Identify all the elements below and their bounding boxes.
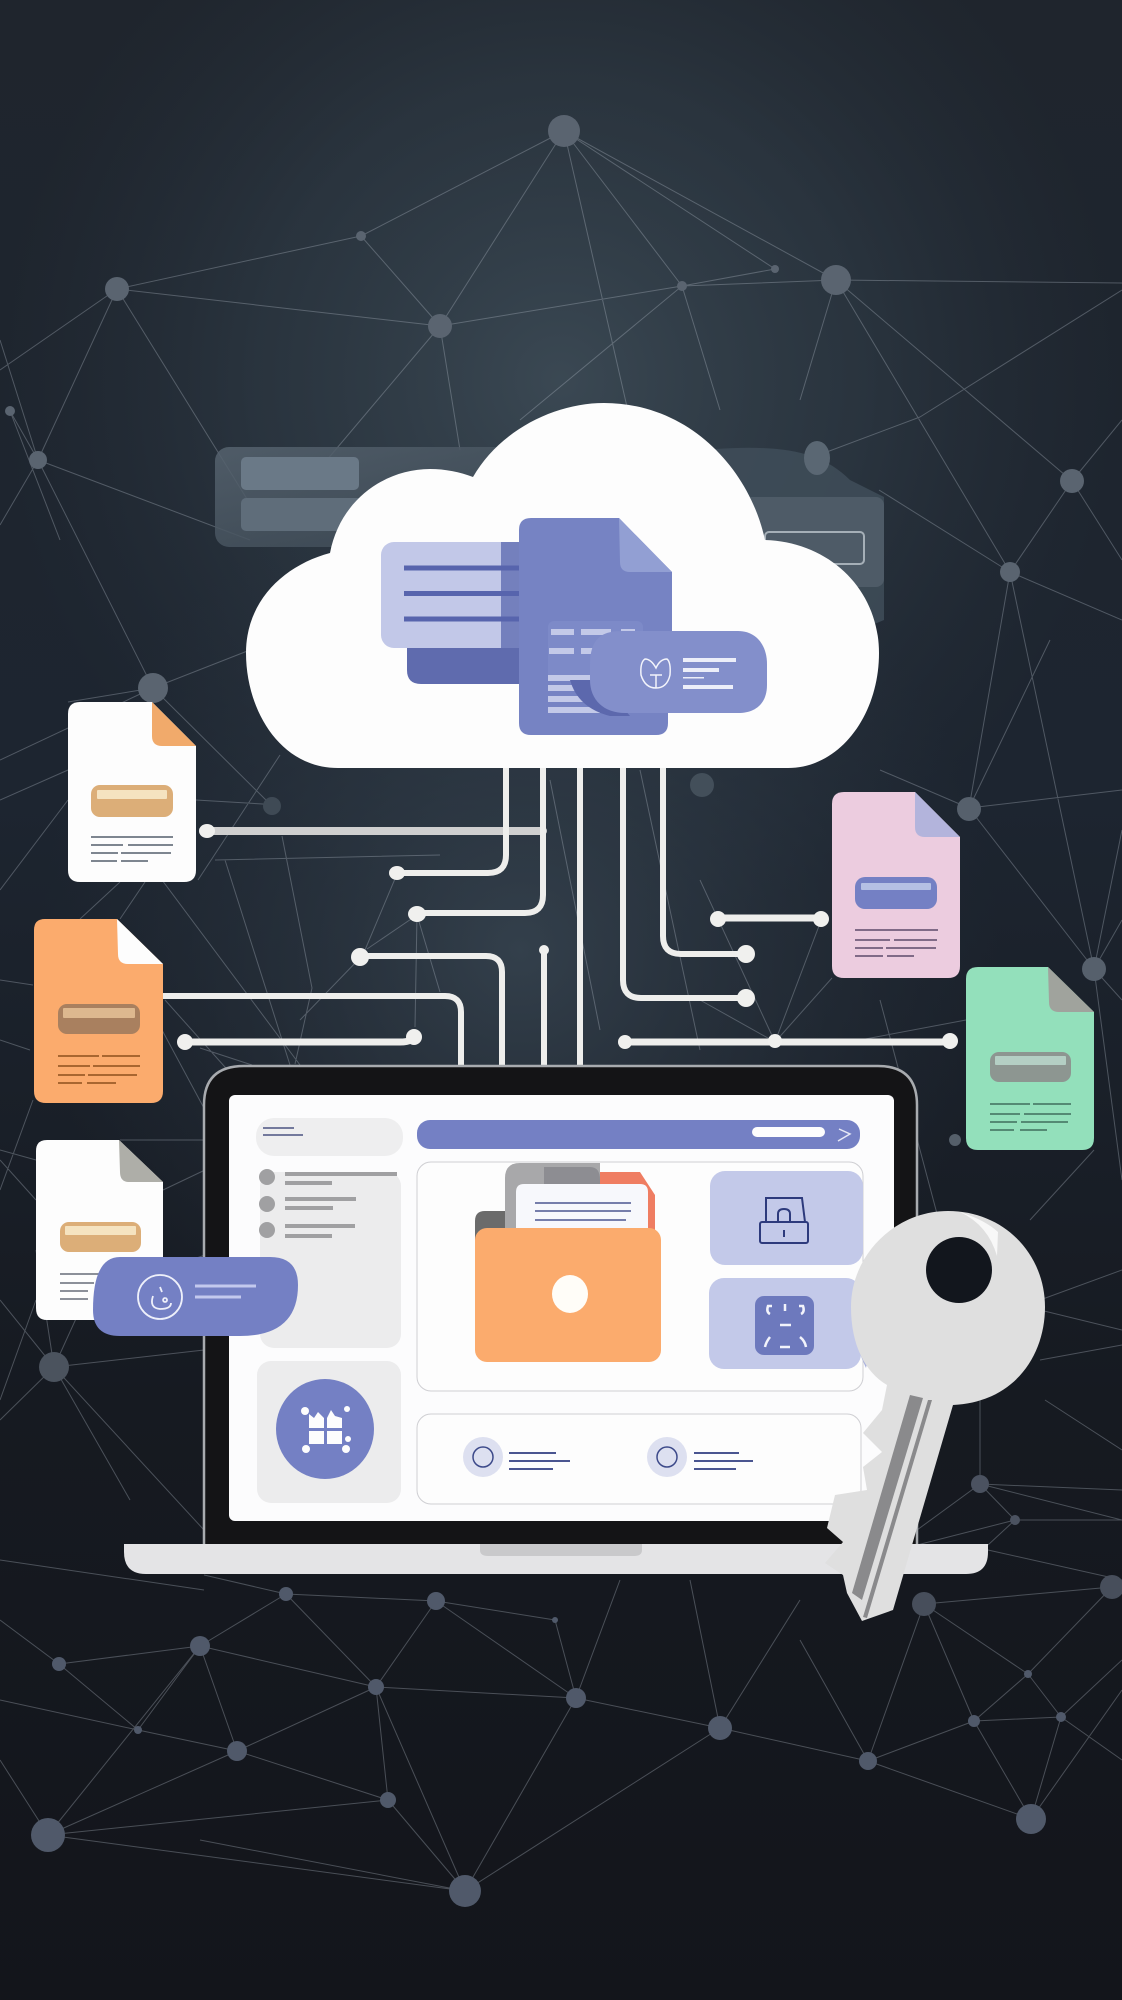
face scan tile: [709, 1278, 861, 1369]
round badge panel: [257, 1361, 401, 1503]
icon: circular badge: [138, 1275, 182, 1319]
document: white with orange fold: [68, 702, 196, 882]
ghost panels behind cloud: [215, 441, 884, 630]
connector end dots: [177, 824, 958, 1050]
folder with documents: [475, 1163, 661, 1362]
sidebar header: [256, 1118, 403, 1156]
lock tile: [710, 1171, 863, 1265]
icon: shield badge on card: [641, 659, 670, 688]
laptop: [124, 1066, 988, 1574]
key hole: [926, 1237, 992, 1303]
key: [825, 1211, 1045, 1621]
icon: padlock: [760, 1198, 808, 1243]
document: pink: [832, 792, 960, 978]
floating label pill: [93, 1257, 298, 1336]
top navigation bar: [417, 1120, 860, 1149]
connector lines between cloud, documents and laptop: [163, 768, 951, 1065]
laptop screen: [229, 1095, 894, 1521]
sidebar list: [259, 1169, 401, 1348]
main content panel: [417, 1162, 863, 1391]
cloud: [246, 403, 879, 768]
document: green: [966, 967, 1094, 1150]
document: orange with white fold: [34, 919, 163, 1103]
laptop lid and bezel: [204, 1066, 917, 1550]
icon: scan frame: [765, 1304, 806, 1347]
cloud document stack: [381, 518, 767, 735]
document: white with grey fold: [36, 1140, 163, 1320]
laptop base: [124, 1544, 988, 1574]
bottom status panel: [417, 1414, 861, 1504]
